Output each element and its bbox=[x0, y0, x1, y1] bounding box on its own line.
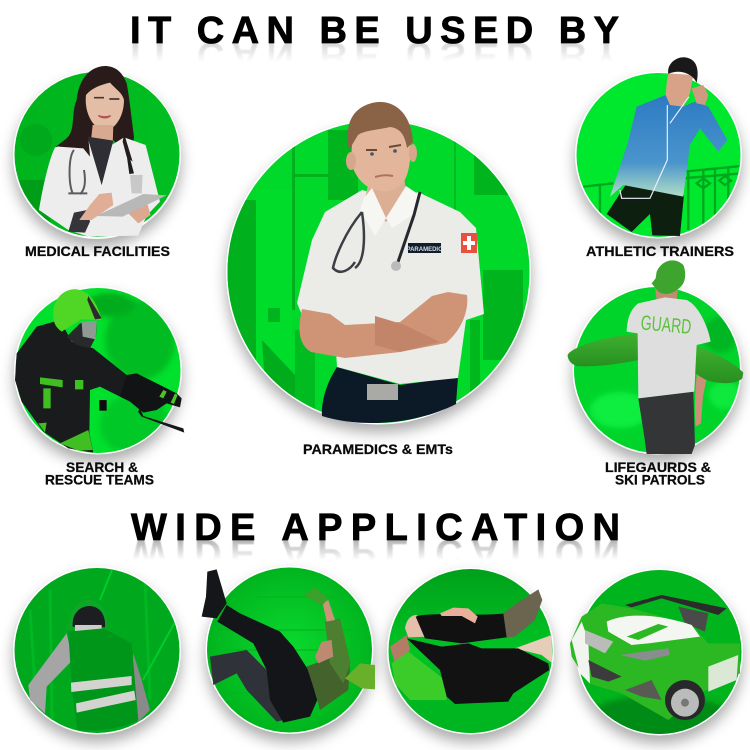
title: it can be used by: IT CAN BE USED BY bbox=[130, 10, 619, 52]
figure: worker bbox=[28, 600, 150, 731]
label: search and rescue teams bbox=[45, 459, 154, 488]
title: it can be used by bbox=[130, 10, 619, 76]
title: wide application: WIDE APPLICATION bbox=[131, 507, 620, 549]
figure: doctor bbox=[39, 66, 167, 237]
label: lifeguards and ski patrols bbox=[605, 459, 711, 488]
figure: lifeguard: GUARD bbox=[640, 312, 692, 339]
panel: worker in safety vest bbox=[13, 566, 181, 734]
figure: firefighter bbox=[15, 289, 184, 453]
panel: paramedics and EMTs bbox=[226, 102, 532, 430]
figure: falling man bbox=[202, 569, 375, 723]
label: paramedics and EMTs: PARAMEDICS & EMTs bbox=[303, 441, 453, 457]
figure: paramedic bbox=[297, 102, 484, 423]
panel: search and rescue teams bbox=[14, 286, 184, 456]
label: athletic trainers: ATHLETIC TRAINERS bbox=[586, 243, 734, 259]
label: search and rescue teams: RESCUE TEAMS bbox=[45, 472, 154, 488]
title: wide application: WIDE APPLICATION bbox=[131, 531, 620, 573]
title: it can be used by: IT CAN BE USED BY bbox=[130, 34, 619, 76]
panel: lifeguards and ski patrols bbox=[568, 260, 743, 455]
label: lifeguards and ski patrols: LIFEGAURDS & bbox=[605, 459, 711, 475]
figure: athlete bbox=[607, 57, 727, 236]
panel: medical facilities bbox=[13, 66, 181, 239]
figure: lifeguard bbox=[568, 260, 743, 454]
label: search and rescue teams: SEARCH & bbox=[66, 459, 138, 475]
figure: injured athlete bbox=[390, 589, 552, 704]
figure: paramedic: PARAMEDIC bbox=[407, 247, 443, 253]
title: wide application bbox=[131, 507, 620, 573]
label: medical facilities: MEDICAL FACILITIES bbox=[25, 243, 170, 259]
panel: leg injury stretch bbox=[387, 568, 554, 735]
panel: athletic trainers bbox=[575, 57, 742, 238]
panel: car crash bbox=[570, 568, 743, 750]
figure: crashed car bbox=[570, 595, 740, 720]
label: lifeguards and ski patrols: SKI PATROLS bbox=[615, 472, 705, 488]
panel: falling worker bbox=[202, 566, 375, 734]
